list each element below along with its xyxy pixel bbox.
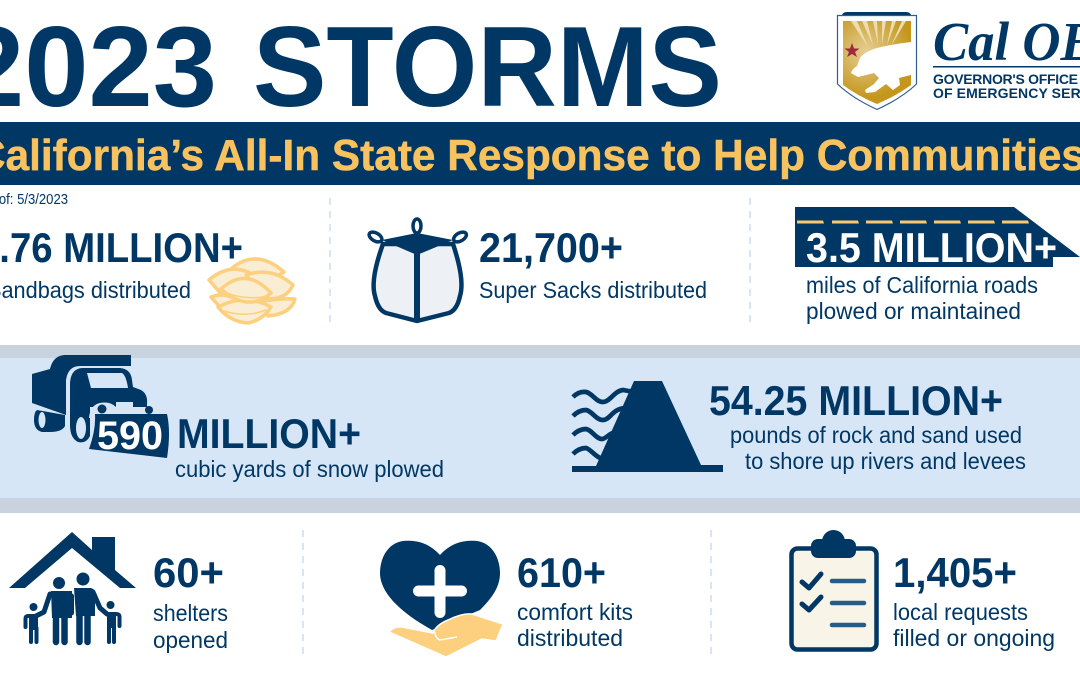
panel: rock and sand stat — [709, 377, 1026, 474]
icon: heart and hand — [380, 541, 503, 657]
stat label: Super Sacks distributed — [479, 277, 707, 303]
stat label line 2: filled or ongoing — [893, 625, 1055, 651]
panel: sandbags — [0, 224, 295, 323]
title: STORMS — [253, 4, 722, 131]
icon: star — [844, 43, 860, 57]
title — [0, 4, 722, 131]
icon: sandbags — [209, 259, 295, 323]
stat label: shelters — [153, 600, 228, 626]
banner — [0, 122, 1080, 185]
icon: road — [795, 207, 1080, 267]
stat label: comfort kits — [517, 599, 633, 625]
icon: shield with bear — [838, 12, 916, 110]
stat label: pounds of rock and sand used — [730, 422, 1022, 448]
stat label: miles of California roads — [806, 272, 1038, 298]
icon: snow plow truck — [32, 355, 172, 458]
panel: snow stat — [175, 410, 444, 482]
logo subtitle: GOVERNOR'S OFFICE — [933, 71, 1078, 87]
stat label: local requests — [893, 599, 1028, 625]
stat value: 60+ — [153, 549, 224, 596]
icon: levee and water — [572, 381, 723, 472]
stat label line 2: opened — [153, 627, 228, 653]
stat value: 1,405+ — [893, 549, 1017, 596]
stat value: 3.5 MILLION+ — [806, 224, 1057, 271]
panel: comfort kits — [380, 541, 633, 657]
logo: Cal OES — [838, 11, 1080, 110]
stat value: MILLION+ — [177, 410, 361, 457]
panel: light blue band — [0, 345, 1080, 513]
panel: local requests — [792, 530, 1055, 651]
stat label line 2: to shore up rivers and levees — [745, 448, 1026, 474]
stat value: 610+ — [517, 549, 606, 596]
stat label: cubic yards of snow plowed — [175, 456, 444, 482]
plow number: 590 — [97, 414, 163, 458]
panel: super sacks — [367, 219, 707, 321]
stat label line 2: distributed — [517, 625, 623, 651]
panel: shelters — [9, 532, 228, 653]
stat value: 21,700+ — [479, 224, 623, 271]
panel: roads — [795, 207, 1080, 324]
stat value: 54.25 MILLION+ — [709, 377, 1003, 424]
icon: clipboard — [792, 530, 876, 650]
icon: super sack — [367, 219, 468, 321]
stat label line 2: plowed or maintained — [806, 298, 1021, 324]
icon: house and family — [9, 532, 136, 642]
